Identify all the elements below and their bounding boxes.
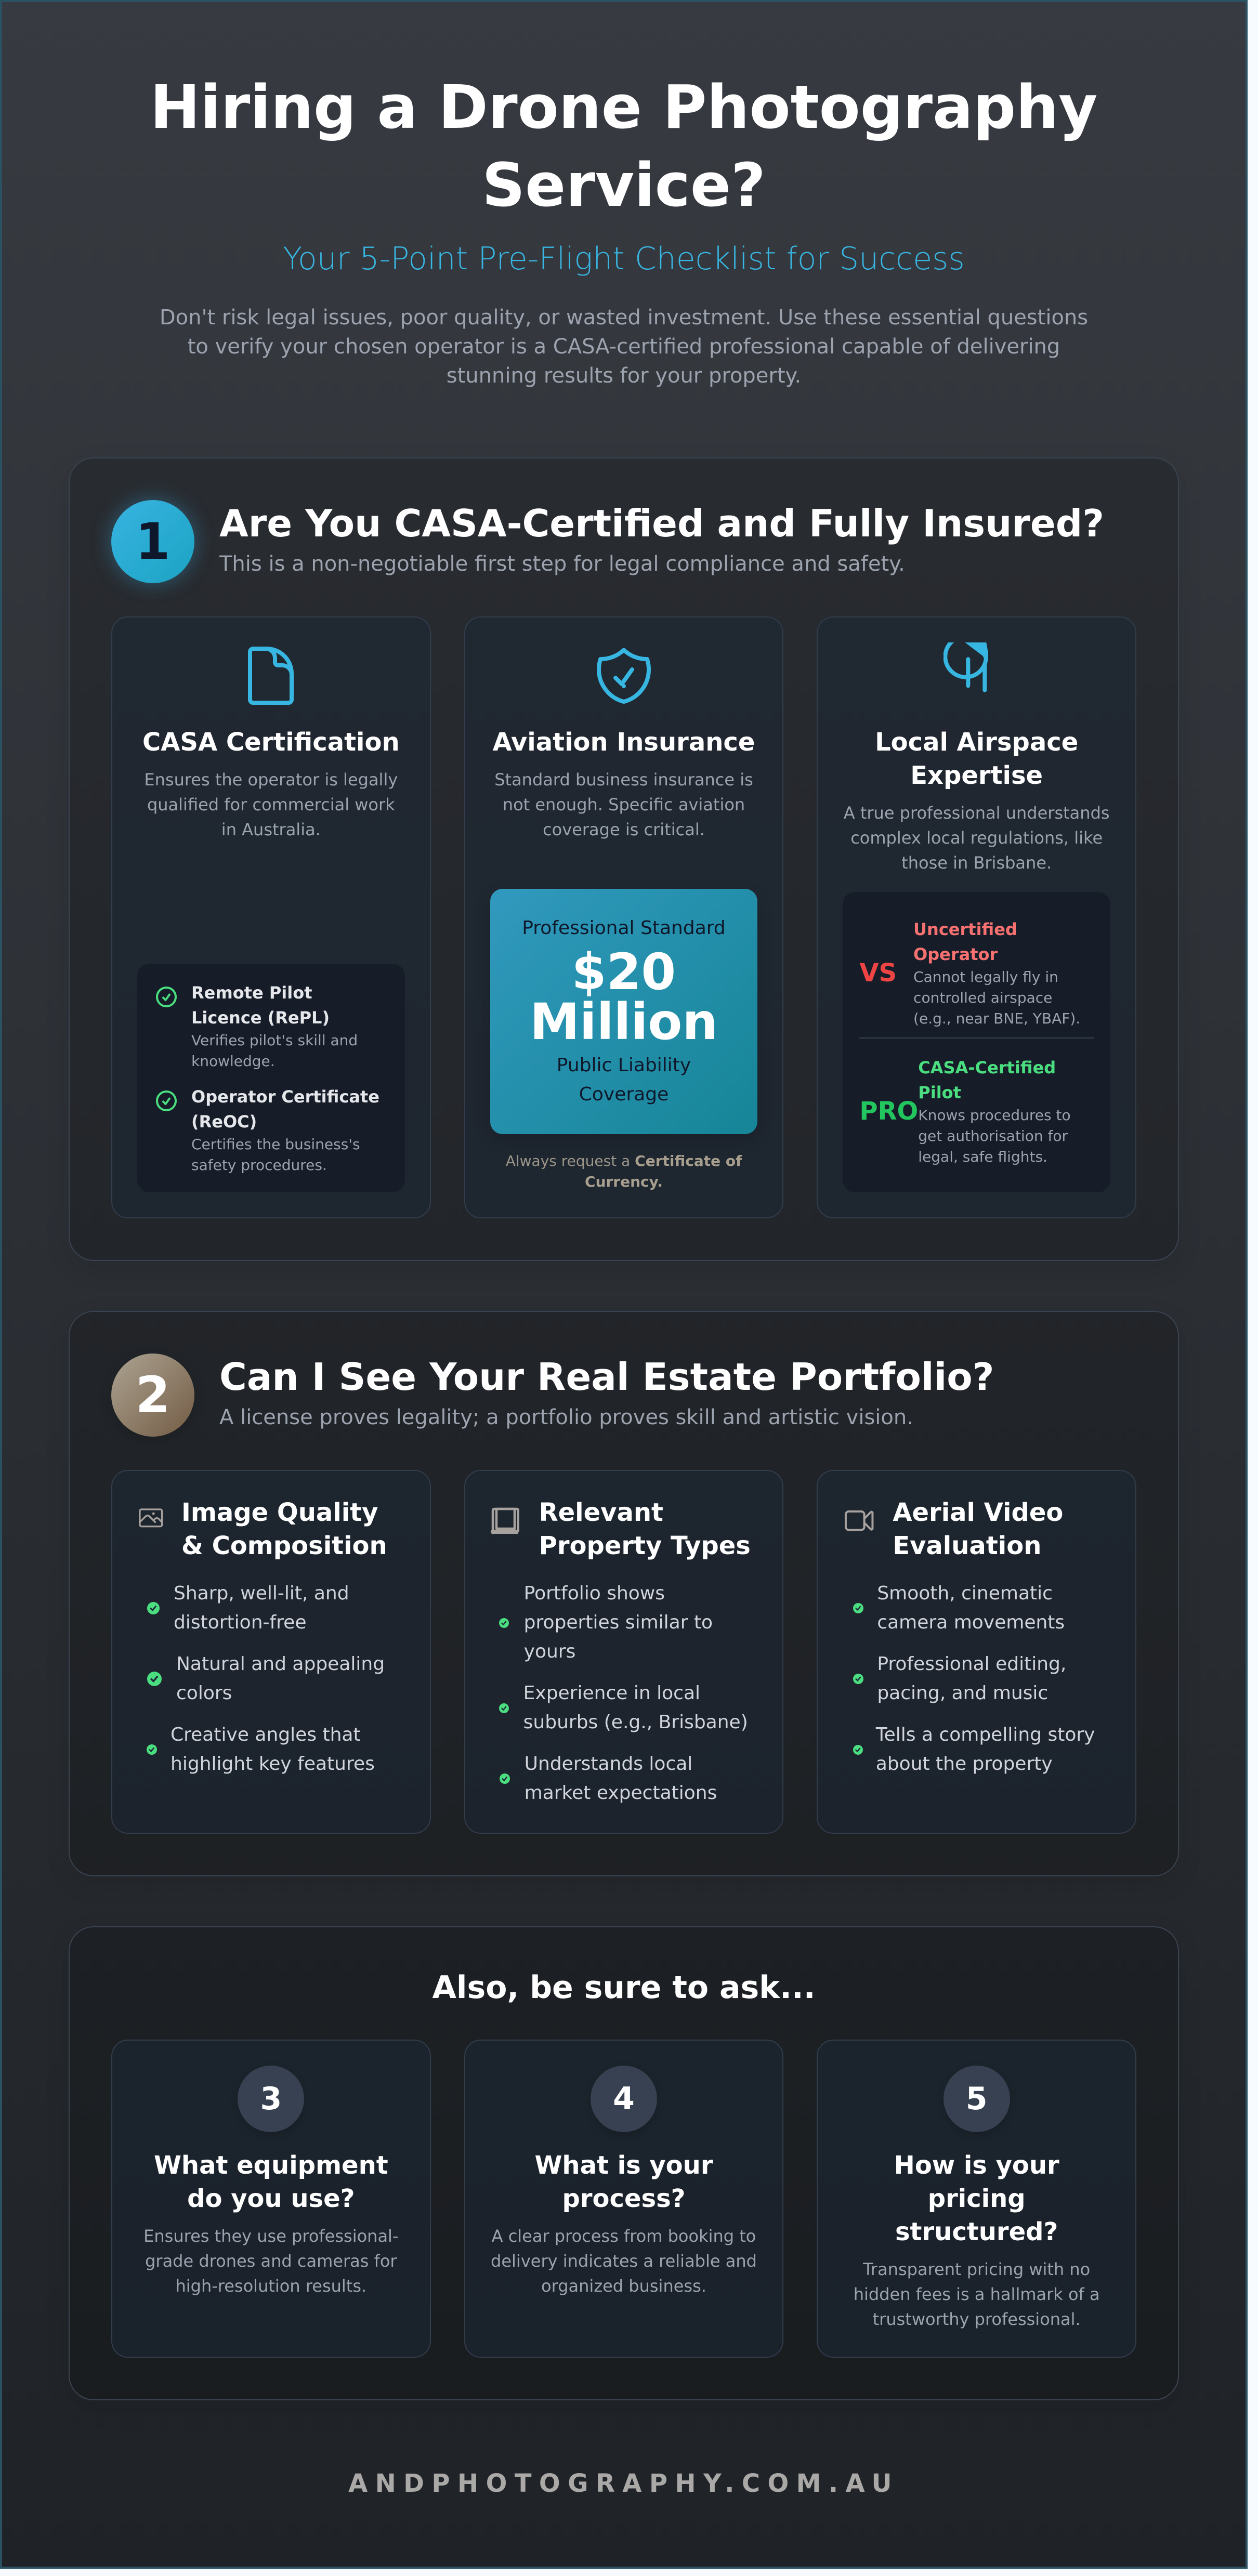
card title: Property Types — [539, 1531, 751, 1560]
big number: $20 — [572, 943, 676, 1001]
PRO label: PRO — [859, 1097, 918, 1126]
number badge 4 — [591, 2066, 657, 2132]
list item: pacing, and music — [877, 1683, 1048, 1704]
comparison row: certified — [859, 1058, 1071, 1165]
list item: yours — [524, 1641, 575, 1662]
card head: property types — [490, 1496, 757, 1562]
card description: hidden fees is a hallmark of a — [854, 2284, 1100, 2304]
item text: (ReOC) — [191, 1112, 257, 1132]
intro text: Don't risk legal issues, poor quality, or wasted investment. Use these essential questions — [160, 306, 1088, 330]
card title — [539, 1496, 751, 1562]
card: aviation insurance — [464, 616, 783, 1218]
card: question 4 — [464, 2040, 783, 2358]
uncertified text: (e.g., near BNE, YBAF). — [913, 1010, 1080, 1027]
card title: What is your — [534, 2151, 713, 2180]
card title: Relevant — [539, 1498, 663, 1527]
certified text: Pilot — [918, 1083, 961, 1102]
list item: Understands local — [525, 1753, 692, 1775]
panel heading: Also, be sure to ask... — [432, 1969, 816, 2006]
number badge 1: 1 — [136, 512, 170, 571]
callout: $20 million cover: Coverage — [579, 1084, 669, 1105]
item text: Operator Certificate — [191, 1087, 379, 1107]
list item: Smooth, cinematic — [877, 1583, 1053, 1604]
VS label: VS — [859, 958, 897, 988]
list item: suburbs (e.g., Brisbane) — [523, 1712, 748, 1733]
card description — [494, 770, 753, 839]
certified text: legal, safe flights. — [918, 1148, 1047, 1165]
card description: not enough. Specific aviation — [503, 795, 745, 814]
list item: Tells a compelling story — [876, 1724, 1095, 1745]
card title — [490, 2149, 757, 2215]
card: aerial video — [817, 1470, 1136, 1834]
card title: structured? — [895, 2217, 1058, 2246]
card: property types — [464, 1470, 783, 1834]
checklist — [490, 1579, 757, 1808]
subheading: question 1: This is a non-negotiable first step for legal compliance and safety. — [219, 552, 905, 576]
card description — [144, 770, 398, 839]
certified text: Knows procedures to — [918, 1107, 1071, 1124]
cards: further questions — [111, 2040, 1136, 2358]
big number — [530, 943, 718, 1051]
list item: about the property — [876, 1753, 1053, 1775]
note: Currency. — [585, 1173, 663, 1190]
card: image quality — [111, 1470, 431, 1834]
card head: image quality — [137, 1496, 405, 1562]
list item: Experience in local — [523, 1683, 700, 1704]
heading: question 2: Can I See Your Real Estate Portfolio? — [219, 1355, 994, 1399]
card description: delivery indicates a reliable and — [491, 2251, 757, 2271]
panel: question 2 portfolio — [69, 1311, 1179, 1876]
card title — [137, 2149, 405, 2215]
card description: complex local regulations, like — [850, 828, 1103, 848]
card description: organized business. — [541, 2276, 706, 2296]
card title: do you use? — [187, 2184, 355, 2213]
number badge 1 — [111, 500, 194, 583]
card description: Standard business insurance is — [494, 770, 753, 790]
note: Always request a Certificate of — [506, 1152, 742, 1169]
number badge 2: 2 — [136, 1366, 170, 1424]
checklist — [137, 1579, 405, 1779]
list item: distortion-free — [174, 1612, 306, 1633]
cards: question 1 — [111, 616, 1136, 1218]
callout: $20 million cover: Professional Standard Public Liability — [522, 917, 726, 1076]
card description — [137, 2224, 405, 2298]
card description: high-resolution results. — [175, 2276, 366, 2296]
card description: Transparent pricing with no — [863, 2259, 1090, 2279]
cards: question 2 — [111, 1470, 1136, 1834]
list item — [843, 1579, 1110, 1637]
card: question 5 — [817, 2040, 1136, 2358]
icon: shield check — [597, 648, 651, 704]
list item — [843, 1650, 1110, 1708]
title: Hiring a Drone Photography — [150, 73, 1097, 142]
certified text — [918, 1058, 1071, 1165]
list item: camera movements — [877, 1612, 1065, 1633]
number badge 3: 3 — [260, 2081, 282, 2117]
comparison box — [843, 892, 1110, 1192]
card description: A clear process from booking to — [492, 2226, 756, 2246]
list item — [137, 1579, 405, 1637]
card description: grade drones and cameras for — [145, 2251, 397, 2271]
list item: Sharp, well-lit, and — [174, 1583, 349, 1604]
subtitle: Your 5-Point Pre-Flight Checklist for Success — [283, 241, 965, 277]
checklist — [843, 1579, 1110, 1779]
item text: Remote Pilot — [191, 983, 312, 1003]
heading: question 1: Are You CASA-Certified and Fully Insured? — [219, 502, 1104, 545]
card: question 3 — [111, 2040, 431, 2358]
certified text: get authorisation for — [918, 1127, 1068, 1145]
card: CASA certification — [111, 616, 431, 1218]
list item — [490, 1750, 757, 1808]
list item — [137, 1720, 405, 1779]
big number: Million — [530, 993, 718, 1051]
card description — [843, 2257, 1110, 2332]
card title: Image Quality — [181, 1498, 378, 1527]
uncertified text: controlled airspace — [913, 989, 1052, 1006]
card: local airspace expertise — [817, 616, 1136, 1218]
icon: airspace glyph — [943, 642, 988, 692]
card description: those in Brisbane. — [901, 853, 1052, 873]
subheading: question 2: A license proves legality; a portfolio proves skill and artistic vision. — [219, 1405, 913, 1429]
card title — [875, 728, 1078, 790]
list item: Creative angles that — [171, 1724, 361, 1745]
panel: also be sure to ask — [69, 1926, 1179, 2400]
intro text — [160, 306, 1088, 388]
icon: green check circle — [156, 987, 177, 1007]
number badge 5: 5 — [966, 2081, 988, 2117]
item text: Certifies the business's — [191, 1136, 360, 1153]
icon: photo — [137, 1504, 165, 1532]
card title: Aviation Insurance — [493, 728, 755, 757]
card head: aerial video — [843, 1496, 1110, 1562]
list item — [137, 1650, 405, 1708]
note — [506, 1152, 742, 1190]
icon: video camera — [843, 1504, 876, 1537]
section header 2 — [111, 1353, 1136, 1437]
number badge 3 — [238, 2066, 304, 2132]
intro text: stunning results for your property. — [447, 364, 801, 388]
number badge 4: 4 — [613, 2081, 635, 2117]
list item: Professional editing, — [877, 1653, 1066, 1675]
list item: market expectations — [525, 1782, 717, 1804]
list item: colors — [176, 1683, 232, 1704]
title: Service? — [482, 151, 766, 220]
item text: knowledge. — [191, 1053, 275, 1070]
list item: Portfolio shows — [524, 1583, 665, 1604]
card description — [490, 2224, 757, 2298]
card description: coverage is critical. — [543, 820, 705, 839]
card description: trustworthy professional. — [873, 2309, 1081, 2329]
card title: pricing — [928, 2184, 1026, 2213]
card description: Ensures they use professional- — [143, 2226, 398, 2246]
section header 1 — [101, 490, 1104, 593]
card title: Evaluation — [893, 1531, 1041, 1560]
checklist item: RePL — [156, 983, 358, 1070]
card description: qualified for commercial work — [147, 795, 395, 814]
card title: CASA Certification — [142, 728, 400, 757]
comparison row: uncertified — [859, 909, 1094, 1039]
card title: Local Airspace — [875, 728, 1078, 757]
checklist box — [137, 964, 405, 1192]
certified text: CASA-Certified — [918, 1058, 1056, 1077]
list item: properties similar to — [524, 1612, 713, 1633]
footer website: ANDPHOTOGRAPHY.COM.AU — [348, 2469, 899, 2498]
card title: How is your — [894, 2151, 1059, 2180]
list item: Natural and appealing — [176, 1653, 385, 1675]
list item — [490, 1579, 757, 1666]
card description — [844, 803, 1110, 873]
item text — [191, 1087, 379, 1174]
card title: & Composition — [181, 1531, 387, 1560]
intro text: to verify your chosen operator is a CASA-certified professional capable of delivering — [188, 335, 1060, 359]
card title — [181, 1496, 387, 1562]
card title — [843, 2149, 1110, 2249]
header text 1 — [219, 502, 1104, 576]
uncertified text: Cannot legally fly in — [913, 968, 1058, 985]
item text: Licence (RePL) — [191, 1008, 330, 1028]
card title: process? — [562, 2184, 685, 2213]
card description: A true professional understands — [844, 803, 1110, 823]
panel: question 1 certification and insurance — [69, 457, 1179, 1261]
item text — [191, 983, 358, 1070]
title — [150, 73, 1097, 220]
checklist item: ReOC — [156, 1087, 379, 1174]
card description: Ensures the operator is legally — [144, 770, 398, 790]
card title — [893, 1496, 1063, 1562]
item text: Verifies pilot's skill and — [191, 1032, 358, 1049]
card title: Aerial Video — [893, 1498, 1063, 1527]
list item — [843, 1720, 1110, 1779]
uncertified text: Operator — [913, 944, 998, 964]
item text: safety procedures. — [191, 1156, 327, 1174]
uncertified text: Uncertified — [913, 919, 1017, 939]
header text 2 — [219, 1353, 994, 1437]
list item: highlight key features — [171, 1753, 375, 1775]
uncertified text — [913, 919, 1080, 1027]
card title: What equipment — [154, 2151, 388, 2180]
list item — [490, 1679, 757, 1737]
card description: in Australia. — [221, 820, 321, 839]
number badge 2 — [111, 1353, 194, 1437]
icon: green check circle — [156, 1090, 177, 1111]
number badge 5 — [943, 2066, 1010, 2132]
icon: document — [248, 647, 294, 705]
icon: book — [491, 1507, 519, 1535]
callout: $20 million cover — [490, 889, 757, 1134]
card title: Expertise — [910, 761, 1043, 790]
